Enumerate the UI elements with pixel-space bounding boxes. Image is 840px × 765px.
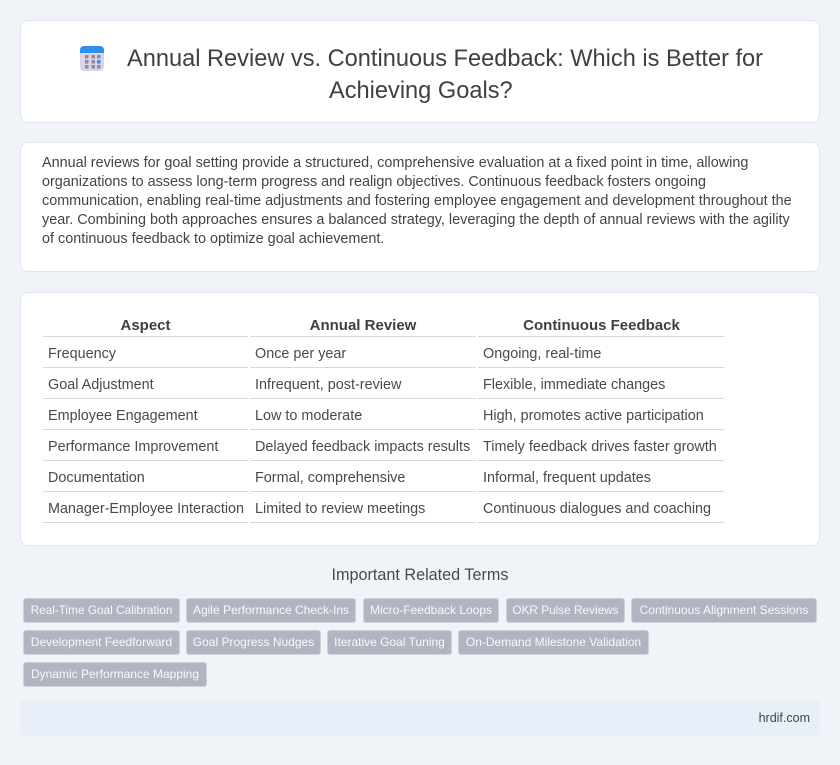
comparison table: Continuous dialogues and coaching [483, 501, 711, 517]
comparison table: Once per year [255, 346, 346, 362]
icon: calendar [80, 46, 104, 71]
comparison table: Limited to review meetings [255, 501, 425, 517]
comparison table: Timely feedback drives faster growth [483, 439, 717, 455]
related terms tags: Iterative Goal Tuning [334, 635, 445, 649]
comparison table: Delayed feedback impacts results [255, 439, 470, 455]
comparison table: Goal Adjustment [48, 377, 154, 393]
summary text [42, 155, 792, 247]
related terms tags: Goal Progress Nudges [193, 635, 314, 649]
comparison table: Low to moderate [255, 408, 362, 424]
related terms tags: Real-Time Goal Calibration [31, 603, 172, 617]
summary text: communication, enabling real-time adjustments and fostering employee engagement and development throughout the [42, 193, 792, 209]
comparison table [43, 317, 724, 523]
table header: Aspect: Aspect [120, 317, 171, 334]
related terms tags: Agile Performance Check-Ins [193, 603, 349, 617]
related terms tags: Development Feedforward [31, 635, 172, 649]
comparison table: Frequency [48, 346, 116, 362]
related terms tags: OKR Pulse Reviews [512, 603, 619, 617]
related terms tags [23, 598, 817, 687]
comparison table: Infrequent, post-review [255, 377, 401, 393]
title: Achieving Goals? [329, 78, 513, 104]
comparison table: Formal, comprehensive [255, 470, 405, 486]
summary text: of continuous feedback to optimize goal achievement. [42, 231, 384, 247]
panel: comparison table [20, 292, 820, 546]
footer bar [20, 701, 820, 735]
comparison table: Ongoing, real-time [483, 346, 601, 362]
title [127, 46, 763, 104]
summary text: year. Combining both approaches ensures a balanced strategy, leveraging the depth of annual reviews with the agility [42, 212, 790, 228]
table header: Annual Review: Annual Review [310, 317, 416, 334]
comparison table: Documentation [48, 470, 145, 486]
title: Annual Review vs. Continuous Feedback: Which is Better for [127, 46, 763, 72]
comparison table: Informal, frequent updates [483, 470, 651, 486]
related terms tags: Continuous Alignment Sessions [640, 603, 808, 617]
panel: summary [20, 142, 820, 272]
summary text: Annual reviews for goal setting provide a structured, comprehensive evaluation at a fixed point in time, allowing [42, 155, 748, 171]
comparison table: High, promotes active participation [483, 408, 704, 424]
comparison table: Performance Improvement [48, 439, 218, 455]
comparison table: Manager-Employee Interaction [48, 501, 244, 517]
table header: Continuous Feedback: Continuous Feedback [523, 317, 680, 334]
related terms tags: Micro-Feedback Loops [370, 603, 492, 617]
related terms tags: Dynamic Performance Mapping [31, 667, 199, 681]
related terms heading: Important Related Terms [332, 566, 508, 584]
comparison table: Employee Engagement [48, 408, 198, 424]
summary text: organizations to assess long-term progress and realign objectives. Continuous feedback fosters ongoing [42, 174, 706, 190]
footer source: hrdif.com [759, 711, 810, 725]
header panel [20, 20, 820, 123]
comparison table: Flexible, immediate changes [483, 377, 665, 393]
related terms tags: On-Demand Milestone Validation [466, 635, 641, 649]
